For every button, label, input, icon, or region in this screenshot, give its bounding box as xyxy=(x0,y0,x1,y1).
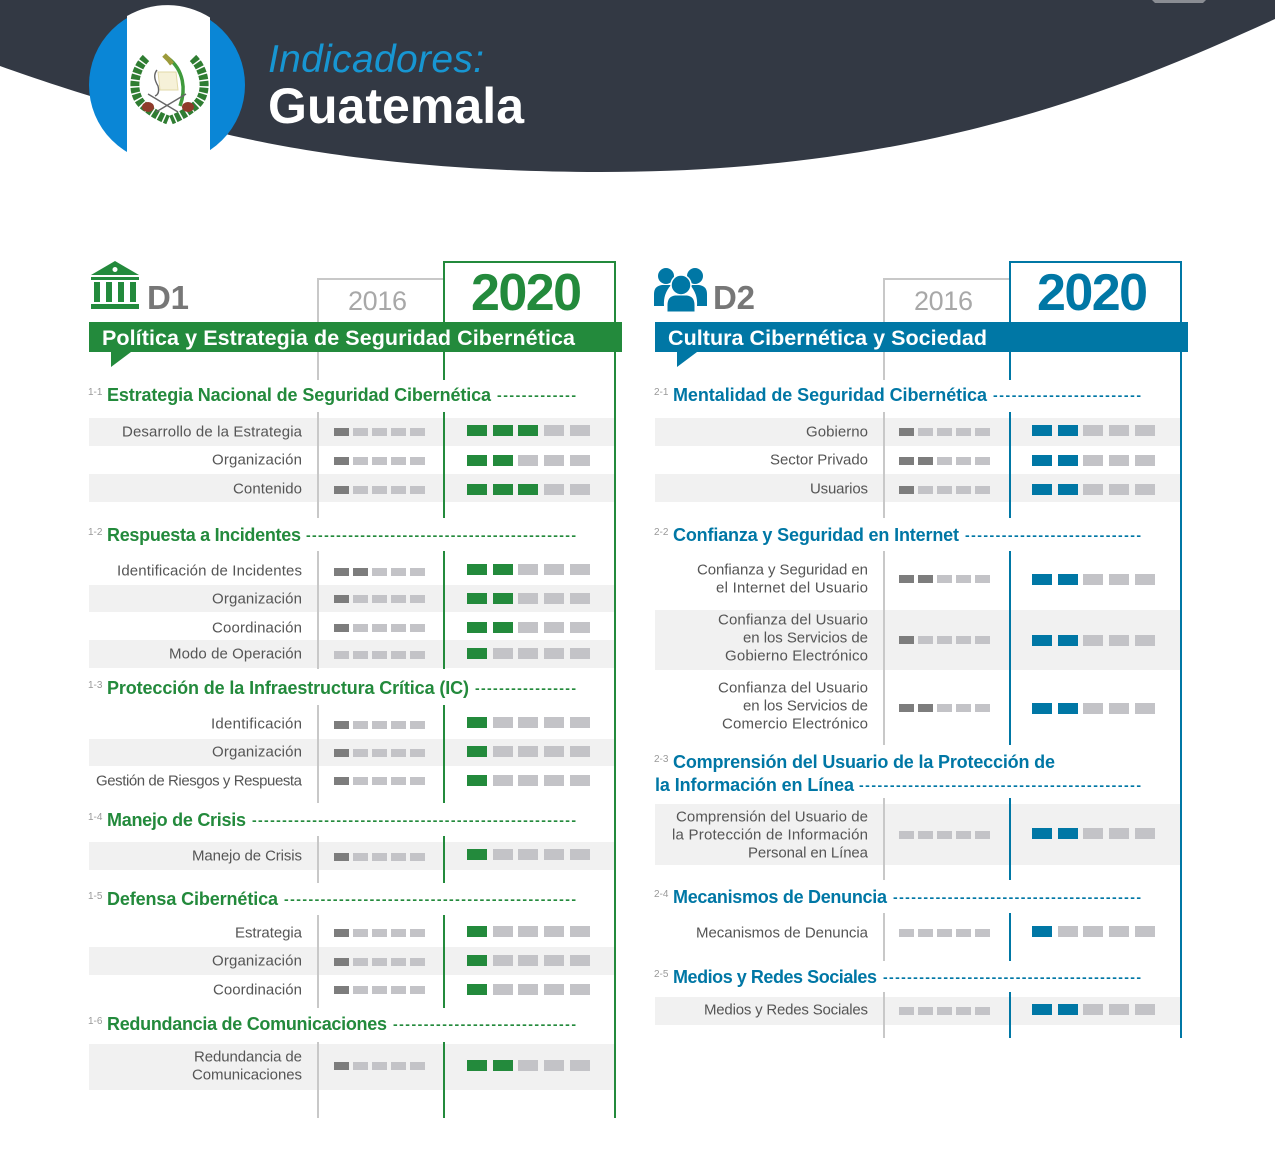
row: Redundancia de Comunicaciones: Redundancia de xyxy=(194,1048,302,1065)
heading 1-3: Protección de la Infraestructura Crítica (IC) xyxy=(107,678,469,698)
row: Confianza comercio electrónico: Confianza del Usuario xyxy=(718,679,868,696)
heading 1-3: 1-3 xyxy=(88,680,103,691)
heading 2-3 xyxy=(654,752,1141,795)
heading 2-3: Comprensión del Usuario de la Protección de xyxy=(673,752,1055,772)
flag of Guatemala xyxy=(89,5,245,165)
heading 1-2: --------------------------------------------- xyxy=(306,527,576,543)
row: Estrategia: Estrategia xyxy=(235,924,303,941)
row: Organización: Organización xyxy=(212,451,302,468)
row: Coordinación: Coordinación xyxy=(212,619,302,636)
row: Gobierno xyxy=(655,418,1181,446)
year frame 2016: 2016 xyxy=(348,286,407,316)
heading 2-4 xyxy=(654,887,1141,907)
row: Confianza comercio electrónico xyxy=(718,679,1155,732)
heading 1-4 xyxy=(88,810,576,830)
heading 2-1: 2-1 xyxy=(654,387,669,398)
row: Confianza gobierno electrónico xyxy=(655,610,1181,670)
title xyxy=(268,38,525,134)
heading 1-5 xyxy=(88,889,576,909)
row: Organización xyxy=(89,947,615,975)
header banner xyxy=(0,0,1275,172)
row: Sector Privado: Sector Privado xyxy=(770,451,868,468)
heading 1-6 xyxy=(88,1014,576,1034)
icon: government building xyxy=(91,261,139,309)
row: Confianza comercio electrónico: en los Servicios de xyxy=(743,697,868,714)
row: Usuarios xyxy=(655,474,1181,502)
column lines xyxy=(884,352,1010,1038)
panel: D2 xyxy=(654,262,1188,1038)
heading 2-5: ------------------------------------------- xyxy=(883,969,1141,985)
row: Identificación: Identificación xyxy=(211,715,302,732)
heading 1-2: 1-2 xyxy=(88,527,103,538)
row: Comprensión: la Protección de Información xyxy=(672,826,868,843)
row: Modo de Operación: Modo de Operación xyxy=(169,645,302,662)
row: Redundancia de Comunicaciones xyxy=(89,1044,615,1090)
heading 1-1: 1-1 xyxy=(88,387,103,398)
row: Organización: Organización xyxy=(212,743,302,760)
row: Confianza internet xyxy=(697,561,1155,596)
heading 2-2: 2-2 xyxy=(654,527,669,538)
heading 1-3: ----------------- xyxy=(475,680,576,696)
row: Organización: Organización xyxy=(212,590,302,607)
row: Mecanismos de Denuncia: Mecanismos de Denuncia xyxy=(696,924,869,941)
D1 label: D1 xyxy=(147,279,189,316)
top right tab xyxy=(1152,0,1206,3)
heading 2-2 xyxy=(654,525,1141,545)
icon: coat of arms xyxy=(135,55,204,120)
year frame 2016 xyxy=(884,279,1009,322)
heading 1-6: ------------------------------ xyxy=(393,1016,576,1032)
row: Organización xyxy=(89,739,615,766)
D2 title band: Cultura Cibernética y Sociedad xyxy=(668,326,987,350)
row: Desarrollo de la Estrategia: Desarrollo de la Estrategia xyxy=(122,423,303,440)
row: Usuarios: Usuarios xyxy=(810,480,868,497)
heading 2-1: ------------------------ xyxy=(993,387,1141,403)
heading 2-1: Mentalidad de Seguridad Cibernética xyxy=(673,385,988,405)
year frame 2020 xyxy=(444,262,615,1118)
row: Medios y Redes Sociales xyxy=(655,997,1181,1025)
heading 2-5: 2-5 xyxy=(654,969,669,980)
heading 2-3: la Información en Línea xyxy=(655,775,855,795)
heading 1-2: Respuesta a Incidentes xyxy=(107,525,301,545)
column lines xyxy=(318,352,444,1118)
row: Organización xyxy=(89,585,615,612)
row: Coordinación xyxy=(212,619,590,636)
D2 label: D2 xyxy=(713,279,755,316)
panel: D1 xyxy=(88,261,622,1118)
row: Medios y Redes Sociales: Medios y Redes Sociales xyxy=(704,1001,868,1018)
title: Indicadores: xyxy=(268,38,484,81)
heading 1-5: ------------------------------------------------ xyxy=(284,891,576,907)
heading 2-4: 2-4 xyxy=(654,889,669,900)
row: Manejo de Crisis: Manejo de Crisis xyxy=(192,847,302,864)
row: Modo de Operación xyxy=(89,640,615,668)
row: Gobierno: Gobierno xyxy=(806,423,868,440)
heading 2-4: ----------------------------------------- xyxy=(893,889,1141,905)
heading 1-4: Manejo de Crisis xyxy=(107,810,246,830)
heading 1-1: Estrategia Nacional de Seguridad Cibernética xyxy=(107,385,492,405)
heading 1-6: Redundancia de Comunicaciones xyxy=(107,1014,387,1034)
heading 2-3: ---------------------------------------------- xyxy=(859,777,1141,793)
row: Comprensión xyxy=(655,804,1181,865)
row: Confianza internet: Confianza y Seguridad en xyxy=(697,561,868,578)
row: Comprensión: Comprensión del Usuario de xyxy=(676,808,868,825)
heading 1-5: 1-5 xyxy=(88,891,103,902)
D2 title band xyxy=(655,322,1188,367)
row: Redundancia de Comunicaciones: Comunicaciones xyxy=(192,1066,302,1083)
row: Gestión de Riesgos y Respuesta xyxy=(96,772,590,789)
heading 1-6: 1-6 xyxy=(88,1016,103,1027)
D1 title band xyxy=(89,322,622,367)
year frame 2020 xyxy=(1010,262,1181,1038)
heading 2-2: ----------------------------- xyxy=(965,527,1141,543)
heading 2-5 xyxy=(654,967,1141,987)
heading 2-2: Confianza y Seguridad en Internet xyxy=(673,525,959,545)
row: Identificación de Incidentes: Identificación de Incidentes xyxy=(117,562,302,579)
row: Contenido: Contenido xyxy=(233,480,302,497)
row: Coordinación: Coordinación xyxy=(213,981,302,998)
row: Comprensión: Personal en Línea xyxy=(748,844,869,861)
row: Organización xyxy=(212,451,590,468)
heading 2-1 xyxy=(654,385,1141,405)
year frame 2016: 2016 xyxy=(914,286,973,316)
row: Confianza gobierno electrónico: Confianza del Usuario xyxy=(718,611,868,628)
heading 2-5: Medios y Redes Sociales xyxy=(673,967,877,987)
heading 1-4: 1-4 xyxy=(88,812,103,823)
row: Contenido xyxy=(89,474,615,502)
D1 title band: Política y Estrategia de Seguridad Cibernética xyxy=(102,326,576,350)
icon: people xyxy=(654,268,707,312)
row: Confianza gobierno electrónico: en los Servicios de xyxy=(743,629,868,646)
row: Sector Privado xyxy=(770,451,1155,468)
heading 1-5: Defensa Cibernética xyxy=(107,889,279,909)
row: Manejo de Crisis xyxy=(89,842,615,870)
heading 1-1: ------------- xyxy=(497,387,576,403)
year frame 2020: 2020 xyxy=(1037,264,1148,322)
row: Confianza gobierno electrónico: Gobierno Electrónico xyxy=(725,647,868,664)
row: Identificación de Incidentes xyxy=(117,562,590,579)
heading 2-3: 2-3 xyxy=(654,754,669,765)
heading 1-4: ------------------------------------------------------ xyxy=(252,812,576,828)
year frame 2020: 2020 xyxy=(471,264,582,322)
row: Gestión de Riesgos y Respuesta: Gestión de Riesgos y Respuesta xyxy=(96,772,303,789)
row: Identificación xyxy=(211,715,590,732)
heading 1-2 xyxy=(88,525,576,545)
title: Guatemala xyxy=(268,78,525,134)
year frame 2016 xyxy=(318,279,443,322)
row: Desarrollo de la Estrategia xyxy=(89,418,615,446)
row: Coordinación xyxy=(213,981,590,998)
row: Organización: Organización xyxy=(212,952,302,969)
row: Mecanismos de Denuncia xyxy=(696,924,1155,941)
row: Confianza comercio electrónico: Comercio Electrónico xyxy=(722,715,868,732)
row: Estrategia xyxy=(235,924,590,941)
row: Confianza internet: el Internet del Usuario xyxy=(716,579,868,596)
heading 2-4: Mecanismos de Denuncia xyxy=(673,887,888,907)
